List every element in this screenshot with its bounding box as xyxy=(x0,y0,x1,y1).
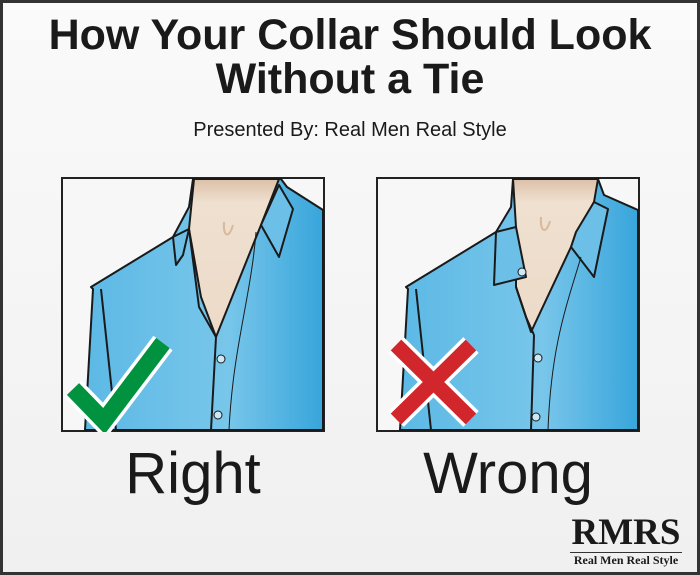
panel: right collar xyxy=(61,177,325,432)
title: How Your Collar Should Look xyxy=(49,11,651,59)
icon: check mark xyxy=(73,343,163,421)
icon: x mark xyxy=(396,345,471,419)
subtitle: Presented By: Real Men Real Style xyxy=(193,119,507,141)
logo: RMRS: Real Men Real Style xyxy=(574,553,678,567)
panel: wrong collar xyxy=(376,177,640,432)
shirt xyxy=(85,179,323,430)
label: Wrong: Wrong xyxy=(423,441,593,506)
title: Without a Tie xyxy=(216,55,484,103)
title xyxy=(49,11,652,103)
logo: RMRS: RMRS xyxy=(572,512,680,553)
label: Right: Right xyxy=(125,441,261,506)
